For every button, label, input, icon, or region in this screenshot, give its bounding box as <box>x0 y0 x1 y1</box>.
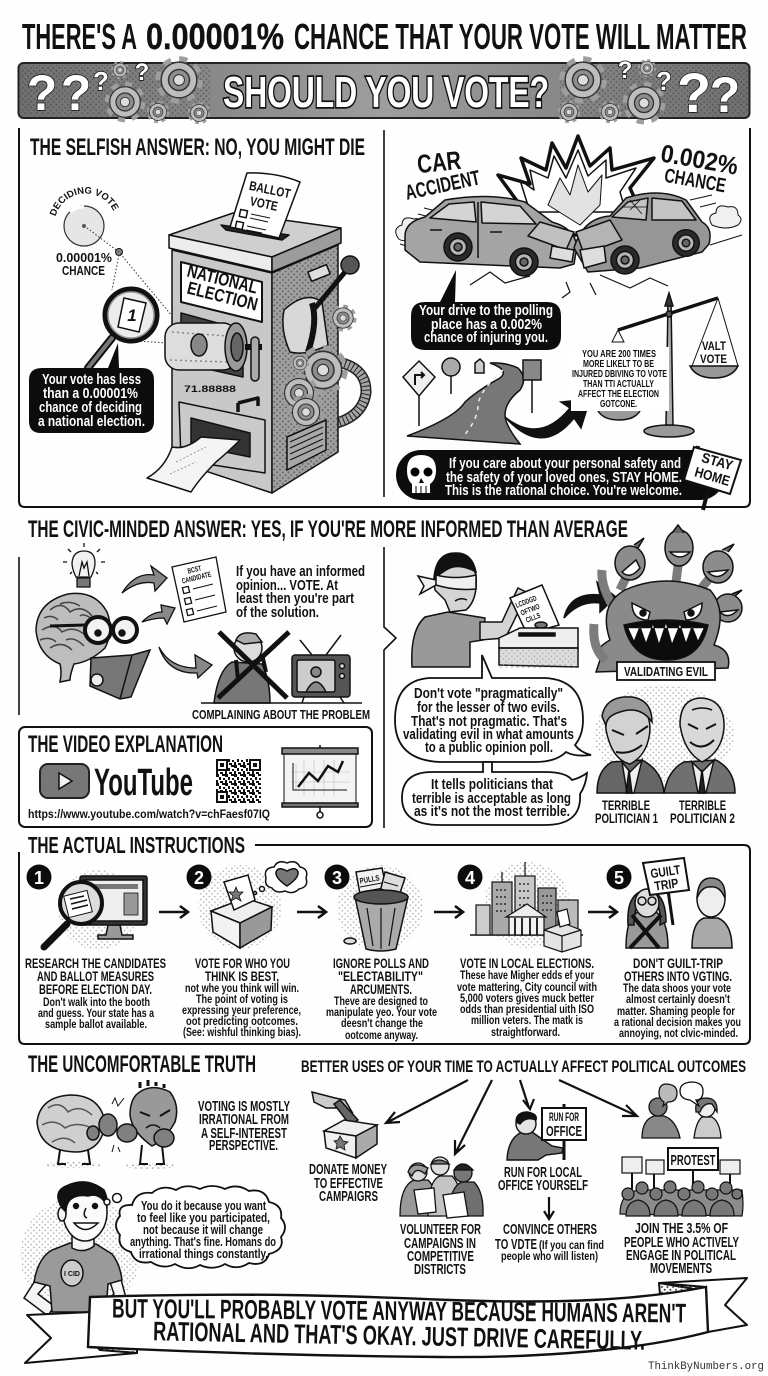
machine vent <box>287 420 326 470</box>
heading: video explanation: THE VIDEO EXPLANATION <box>28 731 223 758</box>
politician labels: TERRIBLE <box>679 798 726 813</box>
head <box>63 1183 107 1241</box>
text: step 5 <box>614 955 741 1040</box>
text: step 4: 5,000 voters gives muck better <box>460 991 594 1005</box>
heading: uncomfortable truth: THE UNCOMFORTABLE TRUTH <box>28 1051 256 1078</box>
heading: selfish answer: THE SELFISH ANSWER: NO, YOU MIGHT DIE <box>30 134 365 161</box>
callout: stay home: This is the rational choice. You're welcome. <box>445 483 682 499</box>
callout: your vote: Your vote has less <box>42 371 141 388</box>
politician 2 <box>664 698 735 793</box>
text: step 2: (See: wishful thinking bias). <box>183 1025 301 1039</box>
question marks: ? <box>677 61 711 124</box>
text: convince others: TO VDTE <box>495 1237 537 1253</box>
number 1 <box>26 864 52 890</box>
text: step 5: almost certainly doesn't <box>626 992 730 1006</box>
step 5 <box>606 858 741 1040</box>
right pan: valt vote: VALT <box>702 339 727 353</box>
machine lever and dial <box>283 256 359 353</box>
text: 200 times more likely <box>571 347 669 411</box>
question marks: ? <box>656 66 672 96</box>
icon: city with ballot box <box>470 862 583 952</box>
question marks: ? <box>27 65 57 121</box>
ribbon body <box>88 1287 708 1357</box>
text: 200 times more likely: AFFECT THE ELECTION <box>578 389 659 400</box>
man <box>692 918 732 948</box>
callout: drive to polling <box>411 270 561 350</box>
ballot paper <box>230 173 300 238</box>
thought dots <box>104 1199 110 1205</box>
text: run for local office: RUN FOR LOCAL <box>504 1165 582 1181</box>
icon: candidate with sign: OFFICE <box>546 1123 582 1140</box>
text: step 2: not whe you think will win. <box>185 981 299 995</box>
text: run for local office: OFFICE YOURSELF <box>498 1178 588 1194</box>
text: step 4: These have Migher edds ef your <box>460 968 594 982</box>
text: step 1: AND BALLOT MEASURES <box>37 968 154 984</box>
thought bubble: anything. That's fine. Homans do <box>130 1234 276 1249</box>
text: step 1: sample ballot available. <box>45 1017 147 1031</box>
speech bubble: pragmatically: validating evil in what amounts <box>403 726 574 743</box>
text: donate money: TO EFFECTIVE <box>314 1176 383 1192</box>
arrow <box>159 906 188 918</box>
text: convince others: people who will listen) <box>501 1251 598 1263</box>
icon: deciding vote circle: 0.00001% <box>56 251 112 265</box>
machine label <box>181 261 262 322</box>
text: step 3: manipulate yeo. Your vote <box>326 1005 437 1019</box>
arrows: brain to ideas <box>122 566 212 678</box>
crash labels <box>403 140 740 205</box>
heading: actual instructions: THE ACTUAL INSTRUCTIONS <box>28 832 245 858</box>
lesser of two evils ballot <box>510 585 559 634</box>
guilt trip sign <box>643 858 689 925</box>
monster necks <box>602 550 728 620</box>
machine label: NATIONAL <box>185 261 260 298</box>
text: 200 times more likely: GOTCONE. <box>600 399 637 410</box>
illustration: car crash <box>396 136 742 298</box>
thought bubble: irrational things constantly. <box>139 1246 268 1261</box>
dust clouds <box>396 206 741 242</box>
crash labels: 0.002% <box>659 140 740 181</box>
t-shirt <box>34 1243 122 1312</box>
lesser of two evils ballot: LCDDGD <box>514 593 538 610</box>
text: voting is irrational: VOTING IS MOSTLY <box>198 1099 290 1115</box>
text: donate money: DONATE MONEY <box>309 1162 387 1178</box>
speech bubble: pragmatically: to a public opinion poll. <box>425 739 553 756</box>
panel: uncomfortable truth <box>20 1051 747 1363</box>
text: step 5: matter. Shaming people for <box>617 1004 735 1018</box>
icon: trash can with polls <box>344 868 408 951</box>
text: informed opinion: least then you're part <box>236 590 354 607</box>
text: voting is irrational: A SELF-INTEREST <box>201 1126 287 1142</box>
text: step 4: straightforward. <box>491 1025 560 1039</box>
callout: your vote: a national election. <box>38 413 145 430</box>
text: step 3: deesn't change the <box>341 1016 423 1030</box>
crash labels: CHANCE <box>663 165 727 197</box>
question marks: ? <box>618 57 632 84</box>
panel: selfish answer <box>18 128 751 510</box>
monster body <box>596 581 729 672</box>
icon: ballot box and heart <box>211 862 307 948</box>
text: convince others: CONVINCE OTHERS <box>503 1222 597 1238</box>
text: step 3: IGNORE POLLS AND <box>333 955 429 971</box>
scale stand <box>644 293 694 437</box>
text: step 3: "ELECTABILITY" <box>338 968 423 984</box>
icon: volunteers <box>400 1157 483 1218</box>
thought bubble: to feel like you participated, <box>137 1210 270 1225</box>
callout: stay home: If you care about your personal safety and <box>449 456 681 472</box>
ribbon tails <box>25 1278 747 1363</box>
illustration: ballot machine <box>147 173 366 493</box>
text: informed opinion: of the solution. <box>236 604 319 621</box>
ground cracks <box>470 272 668 298</box>
machine tap <box>238 398 258 412</box>
number 4: 4 <box>465 868 475 888</box>
title <box>22 16 747 57</box>
text: step 1 <box>25 955 166 1031</box>
complaining person <box>214 633 270 703</box>
icon: monitor <box>80 876 147 939</box>
big arrow <box>505 399 590 438</box>
lesser of two evils ballot: OFTWO <box>519 602 541 617</box>
icon: guilt trip woman and man <box>626 858 732 948</box>
number 3: 3 <box>332 868 342 888</box>
right car <box>574 193 710 274</box>
text: donate money <box>309 1162 387 1205</box>
text: informed opinion: If you have an informed <box>236 563 365 580</box>
thought bubble: not because it will change <box>143 1222 263 1237</box>
neck <box>72 1232 94 1251</box>
text: 200 times more likely: YOU ARE 200 TIMES <box>582 349 656 360</box>
scale beam <box>618 298 718 330</box>
icon: magnifying glass <box>88 289 157 368</box>
icon: skull <box>407 455 436 493</box>
thought bubble: You do it because you want <box>141 1198 266 1213</box>
machine label: ELECTION <box>185 278 260 315</box>
receipt paper <box>147 437 240 492</box>
speech bubble: terrible is acceptable <box>402 762 587 825</box>
number 5: 5 <box>614 868 624 888</box>
thought bubble <box>116 1186 285 1268</box>
speech bubble: terrible is acceptable: as it's not the most terrible. <box>414 803 570 820</box>
number 2 <box>186 864 212 890</box>
text: step 3 <box>326 955 437 1042</box>
illustration: complaining at tv <box>201 632 362 703</box>
icon: protest crowd <box>620 1148 743 1216</box>
arms <box>24 1268 126 1316</box>
step 1 <box>25 864 166 1031</box>
join movements <box>620 1082 743 1277</box>
closing ribbon <box>25 1278 747 1363</box>
politician labels: POLITICIAN 1 <box>595 811 658 826</box>
text: voting is irrational <box>198 1099 290 1154</box>
right pan: valt vote: VOTE <box>700 352 727 366</box>
number 1: 1 <box>34 868 44 888</box>
icon: presentation chart <box>282 745 358 818</box>
label: validating evil: VALIDATING EVIL <box>624 664 708 679</box>
callout: your vote <box>29 343 154 433</box>
text: join movements <box>624 1221 739 1277</box>
icon: deciding vote circle <box>50 187 172 344</box>
ribbon text <box>112 1293 687 1356</box>
x mark <box>218 632 289 698</box>
guilt trip sign: GUILT <box>649 862 681 881</box>
step 4 <box>457 862 597 1039</box>
text: step 4: odds than presidential uith ISO <box>460 1002 594 1016</box>
crash labels: ACCIDENT <box>403 166 482 205</box>
callout: drive to polling: chance of injuring you. <box>424 329 548 346</box>
illustration: validating evil monster <box>594 525 742 680</box>
speech bubble: terrible is acceptable: terrible is acceptable as long <box>412 790 571 807</box>
rect sign <box>523 360 541 413</box>
heart <box>140 1145 164 1164</box>
machine door <box>179 402 265 473</box>
ballot paper: VOTE <box>249 193 279 214</box>
text: step 3: Theve are designed to <box>334 994 428 1008</box>
text: volunteer <box>400 1222 481 1278</box>
text: 200 times more likely: THAN TTI ACTUALLY <box>583 379 654 390</box>
text: convince others: (If you can find <box>539 1240 604 1252</box>
small sign <box>475 359 484 373</box>
number 4 <box>458 864 482 890</box>
big arrow <box>564 582 616 618</box>
burst <box>498 136 654 235</box>
ballot paper: BALLOT <box>248 178 292 201</box>
text: step 2: VOTE FOR WHO YOU <box>195 955 290 971</box>
text: step 2: oot predicting ootcomes. <box>186 1014 298 1028</box>
road <box>407 363 524 444</box>
watermark: ThinkByNumbers.org <box>648 1361 764 1373</box>
machine numbers: 71.88888 <box>184 384 236 394</box>
text: step 2: THINK IS BEST, <box>205 968 279 984</box>
brain <box>58 1150 90 1164</box>
text: convince others <box>495 1222 604 1263</box>
illustration: terrible politicians <box>594 685 735 826</box>
icon: best candidate checklist <box>172 557 226 622</box>
machine gears <box>283 307 354 427</box>
text: donate money: CAMPAIGRS <box>319 1189 378 1205</box>
panel: video explanation <box>19 727 372 827</box>
text: join movements: MOVEMENTS <box>650 1261 712 1277</box>
title: 0.00001% <box>146 16 284 57</box>
text: step 2: The point of voting is <box>196 992 288 1006</box>
text: step 1: RESEARCH THE CANDIDATES <box>25 955 166 971</box>
text: step 3: ARCUMENTS. <box>350 981 412 997</box>
illustration: road and signs <box>403 358 590 444</box>
blindfold <box>418 575 476 594</box>
illustration: scale <box>597 293 738 437</box>
voter head <box>434 559 476 612</box>
icon: deciding vote circle: DECIDING VOTE <box>50 187 119 216</box>
icon: candidate with sign <box>507 1104 586 1160</box>
monster heads <box>615 525 742 622</box>
question marks: ? <box>135 59 149 86</box>
motion lines <box>400 195 742 250</box>
text: volunteer: CAMPAIGNS IN <box>404 1236 476 1252</box>
callout: stay home: the safety of your loved ones, STAY HOME. <box>446 470 682 486</box>
run for office <box>495 1104 604 1263</box>
illustration: blindfolded voter <box>412 553 616 668</box>
question marks: ? <box>93 66 109 96</box>
vote roll <box>165 313 262 381</box>
sign: stay home <box>684 446 741 510</box>
text: step 1: Don't walk into the booth <box>43 995 150 1009</box>
crash labels: CAR <box>416 145 463 179</box>
title: THERE'S A <box>22 16 137 57</box>
callout: your vote: than a 0.00001% <box>43 385 138 402</box>
left car <box>405 196 577 276</box>
panel: civic-minded answer <box>19 516 742 828</box>
text: voting is irrational: PERSPECTIVE. <box>209 1138 278 1154</box>
illustration: brain boxing heart <box>37 1080 177 1169</box>
illustration: voter character <box>20 1182 140 1316</box>
icon: lightbulb <box>63 543 105 587</box>
diamond sign <box>403 361 435 426</box>
number 2: 2 <box>194 868 204 888</box>
voter body <box>412 612 485 667</box>
speech bubble: terrible is acceptable: It tells politicians that <box>431 776 553 793</box>
voter arm <box>480 588 526 640</box>
step 3 <box>324 864 437 1042</box>
number 3 <box>324 864 350 890</box>
boxing gloves <box>87 1114 174 1147</box>
banner gears left <box>108 60 208 122</box>
icon: play button <box>40 764 89 798</box>
badge: I CID <box>64 1271 80 1278</box>
icon: trash can with polls: PULLS <box>359 873 381 886</box>
icon: best candidate checklist: BCST <box>187 563 203 576</box>
protest sign: PROTEST <box>670 1152 716 1169</box>
sign: stay home: HOME <box>693 464 732 489</box>
text: join movements: JOIN THE 3.5% OF <box>635 1221 728 1237</box>
arrow <box>297 906 326 918</box>
lesser of two evils ballot: CILLS <box>524 611 542 625</box>
url: https://www.youtube.com/watch?v=chFaesf07IQ <box>28 807 270 821</box>
text: step 1: BEFORE ELECTION DAY. <box>39 981 152 997</box>
text: step 4: million veters. The matk is <box>471 1013 583 1027</box>
text: voting is irrational: IRRATIONAL FROM <box>199 1112 289 1128</box>
text: step 1: and guess. Your state has a <box>38 1006 154 1020</box>
text: volunteer: DISTRICTS <box>414 1262 466 1278</box>
machine pipe <box>322 362 366 426</box>
question marks: ? <box>61 65 91 121</box>
banner heading: SHOULD YOU VOTE? <box>223 68 549 117</box>
arrow <box>434 906 463 918</box>
icon: deciding vote circle: CHANCE <box>62 264 105 278</box>
tv <box>292 635 350 703</box>
label: validating evil <box>617 662 715 680</box>
callout: stay home <box>396 446 741 510</box>
callout: drive to polling: place has a 0.002% <box>431 316 542 333</box>
text: volunteer: VOLUNTEER FOR <box>400 1222 481 1238</box>
text: step 4: VOTE IN LOCAL ELECTIONS. <box>460 955 594 971</box>
callout: drive to polling: Your drive to the polling <box>419 302 553 319</box>
icon: magnifier <box>44 882 102 947</box>
text: step 4 <box>457 955 597 1039</box>
qr code <box>216 759 261 803</box>
youtube wordmark: YouTube <box>94 762 193 804</box>
right pan: valt vote <box>690 298 738 378</box>
politician labels <box>595 798 735 826</box>
machine body <box>169 213 341 493</box>
icon: hand and donation box <box>312 1092 377 1158</box>
text: 200 times more likely: INJURED DBIVING TO VOTE <box>572 369 667 380</box>
speech bubble: pragmatically: Don't vote "pragmatically" <box>414 685 563 702</box>
icon: candidate with sign: RUN FOR <box>549 1110 579 1124</box>
text: informed opinion: opinion... VOTE. At <box>236 577 338 594</box>
icon: brain with glasses and book <box>36 593 150 699</box>
text: step 5: The data shoos your vote <box>623 981 731 995</box>
politician 1 <box>597 697 664 793</box>
text: step 2 <box>182 955 301 1039</box>
icon: best candidate checklist: CANDIDATE <box>181 570 212 586</box>
guilt trip sign: TRIP <box>653 875 680 894</box>
step 2 <box>182 862 307 1039</box>
banner: should you vote <box>18 57 750 124</box>
icon: people talking <box>642 1082 721 1138</box>
left pan <box>597 330 641 420</box>
politician labels: POLITICIAN 2 <box>670 811 735 826</box>
donate money <box>309 1092 387 1205</box>
text: volunteer: COMPETITIVE <box>407 1249 474 1265</box>
text: 200 times more likely: MORE LIKELT TO BE <box>583 359 654 370</box>
text: step 4: vote mattering, City council with <box>457 980 597 994</box>
text: step 2: expressing yeur preference, <box>182 1003 301 1017</box>
speech bubble: pragmatically <box>395 655 591 762</box>
text: step 5: DON'T GUILT-TRIP <box>633 955 723 971</box>
ballot box <box>499 628 578 668</box>
x mark <box>630 915 661 948</box>
text: informed opinion <box>236 563 365 621</box>
sign: stay home: STAY <box>700 449 736 473</box>
volunteer <box>400 1157 483 1278</box>
text: step 3: ootcome anyway. <box>345 1028 418 1042</box>
question marks: ? <box>710 67 740 123</box>
politician labels: TERRIBLE <box>602 798 650 813</box>
label: complaining: COMPLAINING ABOUT THE PROBLEM <box>192 707 370 722</box>
speech bubble: pragmatically: That's not pragmatic. That's <box>411 713 567 730</box>
text: run for local office <box>498 1165 588 1194</box>
speech bubble: pragmatically: for the lesser of two evils. <box>417 699 560 716</box>
panel: actual instructions <box>19 832 750 1044</box>
number 5 <box>606 864 632 890</box>
banner gears right <box>560 60 662 122</box>
arrows: better uses <box>386 1080 637 1219</box>
woman <box>626 912 668 948</box>
icon: magnifying glass: 1 <box>127 306 137 325</box>
callout: your vote: chance of deciding <box>39 399 142 416</box>
arrow <box>588 906 617 918</box>
round sign <box>442 358 460 394</box>
monster face <box>632 603 702 620</box>
question marks <box>27 57 740 124</box>
